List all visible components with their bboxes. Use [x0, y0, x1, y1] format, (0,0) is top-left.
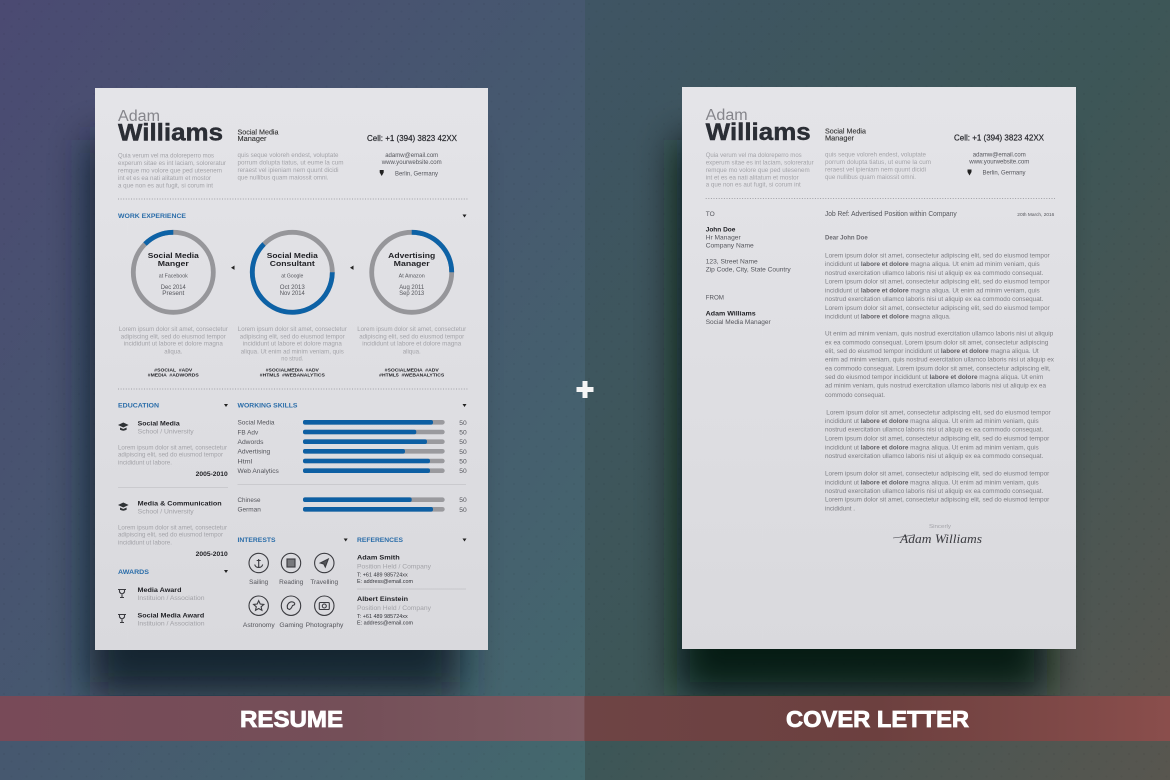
intro text left: a que non es aut fugit, si corum int: [706, 182, 801, 189]
sender block: FROM: [706, 294, 724, 301]
section: awards: Instituion / Association: [138, 595, 205, 602]
intro text right: reraest vel ipieniam nem quunt dicidi: [238, 167, 339, 174]
panel: resume page: [95, 88, 488, 650]
bottom label band: [0, 696, 1170, 741]
letter paragraph 2: elit, sed do eiusmod tempor incididunt ut labore et dolore magna aliqua. Ut: [825, 348, 1039, 355]
hashtags: #HTML5 #WEBANALYTICS: [379, 373, 444, 378]
job ring: Social Media Manger: Dec 2014: [161, 284, 186, 291]
icon: book: [281, 553, 301, 573]
contact details: Berlin, Germany: [395, 170, 439, 177]
skill labels: Web Analytics: [238, 468, 280, 475]
section: interests: [238, 537, 348, 629]
contact details: Berlin, Germany: [982, 170, 1026, 177]
letter paragraph 4: [825, 471, 1050, 512]
icon: anchor: [249, 553, 268, 573]
letter paragraph 2: [825, 331, 1055, 399]
job description 2: incididunt ut labore et dolore magna: [243, 341, 342, 348]
skill values: [459, 420, 467, 514]
skill values: 50: [459, 449, 467, 456]
letter paragraph 1: Lorem ipsum dolor sit amet, consectetur adipiscing elit, sed do eiusmod tempor: [825, 252, 1050, 259]
skill labels: German: [238, 507, 261, 514]
job description 3: [357, 326, 467, 355]
skill values: 50: [459, 439, 467, 446]
letter paragraph 1: Lorem ipsum dolor sit amet, consectetur adipiscing elit, sed do eiusmod tempor: [825, 305, 1050, 312]
job ring: Social Media Consultant: at Google: [281, 274, 303, 280]
skill labels: Advertising: [238, 449, 271, 456]
job description 2: Lorem ipsum dolor sit amet, consectetur: [238, 326, 348, 333]
contact details: [381, 152, 442, 177]
icon: graduation cap: [118, 502, 129, 511]
hashtags: [148, 368, 444, 378]
job ring: Social Media Manger: Social Media: [148, 251, 200, 260]
letter paragraph 3: Lorem ipsum dolor sit amet, consectetur adipiscing elit, sed do eiusmod tempor: [826, 409, 1051, 416]
recipient block: Hr Manager: [706, 234, 741, 241]
interest labels: Gaming: [279, 622, 304, 629]
section: awards: Instituion / Association: [138, 621, 205, 628]
job title: Social Media: [825, 129, 866, 136]
letter paragraph 1: incididunt ut labore et dolore magna aliqua.: [825, 314, 951, 321]
skill values: 50: [459, 468, 467, 475]
letter paragraph 1: incididunt ut labore et dolore magna aliqua. Ut enim ad minim veniam, quis: [825, 261, 1040, 268]
intro text right: quis seque voloreh endest, voluptate: [238, 152, 339, 159]
intro text right: reraest vel ipieniam nem quunt dicidi: [825, 166, 926, 174]
section: education: Lorem ipsum dolor sit amet, consectetur: [118, 444, 227, 451]
letter paragraph 1: nostrud exercitation ullamco laboris nisi ut aliquip ex ea commodo consequat.: [825, 296, 1043, 303]
job description 3: Lorem ipsum dolor sit amet, consectetur: [357, 326, 467, 333]
letter paragraph 2: enim ad minim veniam, quis nostrud exercitation ullamco laboris nisi ut aliquip ex: [825, 357, 1055, 364]
salutation: Dear John Doe: [825, 235, 868, 242]
paper sheet: [95, 88, 488, 650]
letter paragraph 1: incididunt ut labore et dolore magna aliqua. Ut enim ad minim veniam, quis: [825, 287, 1040, 294]
intro text left: experum sitae es int laciam, soloreratur: [706, 160, 814, 166]
phone: Cell: +1 (394) 3823 42XX: [367, 133, 457, 143]
skill labels: [238, 420, 280, 514]
skill values: 50: [459, 420, 467, 427]
section: references: Position Held / Company: [357, 605, 432, 612]
job ring: Advertising Manager: At Amazon: [399, 274, 425, 280]
interest labels: Photography: [306, 622, 344, 629]
section: references: [357, 537, 466, 627]
intro text left: remque mo volore que ped utesenem: [118, 168, 222, 174]
first name: Adam: [118, 108, 160, 125]
label: resume: RESUME: [240, 706, 343, 732]
sign-off: Sincerly: [929, 524, 951, 530]
section: interests: INTERESTS: [238, 537, 276, 544]
letter paragraph 3: nostrud exercitation ullamco laboris nisi ut aliquip ex ea commodo consequat.: [825, 427, 1043, 434]
hashtags: #SOCIAL #ADV: [154, 368, 192, 372]
intro text left: [118, 152, 227, 190]
icon: rocket: [315, 553, 334, 573]
recipient block: John Doe: [706, 226, 736, 233]
job title: Manager: [238, 136, 267, 143]
intro text right: quis seque voloreh endest, voluptate: [825, 152, 926, 158]
section: education: [118, 402, 228, 558]
intro text right: porrum dolupta tiatus, ut eume la cum: [238, 159, 344, 166]
job description 2: adipiscing elit, sed do eiusmod tempor: [240, 334, 346, 340]
job ring: Social Media Consultant: Social Media: [267, 251, 319, 260]
job ring: Social Media Consultant: [252, 232, 332, 312]
job ring: Advertising Manager: [372, 232, 452, 312]
job ring: Advertising Manager: Sep 2013: [399, 290, 425, 297]
contact details: adamw@email.com: [385, 152, 438, 159]
letter paragraph 3: nostrud exercitation ullamco laboris nisi ut aliquip ex ea commodo consequat.: [825, 453, 1043, 460]
panel: cover letter page: [682, 87, 1076, 649]
job ring: Advertising Manager: Aug 2011: [399, 284, 425, 291]
section: education: Social Media: [138, 420, 180, 428]
letter paragraph 2: commodo consequat.: [825, 392, 885, 399]
letter paragraph 3: [825, 409, 1051, 460]
job ring: Social Media Consultant: Consultant: [270, 259, 315, 268]
icon: trophy: [118, 614, 126, 622]
job description 2: aliqua. Ut enim ad minim veniam, quis: [241, 348, 344, 355]
letter paragraph 2: Ut enim ad minim veniam, quis nostrud exercitation ullamco laboris nisi ut aliquip: [825, 331, 1054, 338]
section: education: Media & Communication: [138, 500, 222, 507]
section: references: E: address@email.com: [357, 579, 414, 585]
section: education: adipiscing elit, sed do eiusmod tempor: [118, 452, 223, 459]
icon: location pin: [380, 170, 384, 176]
job ring: Advertising Manager: Advertising: [388, 251, 436, 260]
label: cover letter: COVER LETTER: [786, 706, 969, 732]
letter paragraph 4: Lorem ipsum dolor sit amet, consectetur adipiscing elit, sed do eiusmod tempor: [825, 471, 1050, 478]
last name: Williams: [118, 120, 223, 147]
skill labels: Chinese: [238, 497, 261, 504]
date: 20th March, 2016: [1017, 212, 1055, 218]
paper shadow: resume: [90, 140, 460, 695]
skill values: 50: [459, 458, 467, 466]
section: education: EDUCATION: [118, 402, 159, 409]
job reference: Job Ref: Advertised Position within Company: [825, 209, 957, 218]
recipient block: [706, 211, 791, 274]
arrow: [231, 266, 234, 270]
letter paragraph 2: sed do eiusmod tempor incididunt ut labore et dolore magna aliqua. Ut enim: [825, 374, 1044, 381]
intro text left: a que non es aut fugit, si corum int: [118, 182, 213, 190]
icon: gamepad: [281, 596, 301, 615]
letter paragraph 3: Lorem ipsum dolor sit amet, consectetur adipiscing elit, sed do eiusmod tempor: [825, 436, 1050, 443]
contact details: [968, 151, 1029, 177]
icon: trophy: [118, 590, 126, 598]
letter paragraph 1: [825, 252, 1050, 321]
job description 3: incididunt ut labore et dolore magna: [362, 341, 462, 348]
icon: star: [249, 596, 268, 615]
section: references: T: +61 489 985724xx: [357, 614, 408, 620]
section: references: REFERENCES: [357, 537, 403, 544]
interest labels: Travelling: [310, 579, 339, 586]
skill values: 50: [459, 430, 467, 436]
interest labels: Astronomy: [243, 622, 276, 629]
intro text left: int et es ea nati alitatum et mostor: [706, 174, 799, 181]
skill labels: FB Adv: [238, 429, 259, 436]
intro text left: int et es ea nati alitatum et mostor: [118, 175, 212, 182]
interest labels: Sailing: [249, 579, 269, 586]
background: cover letter side: [585, 0, 1170, 780]
skill labels: Social Media: [238, 420, 275, 427]
skill bars: track: [303, 420, 445, 512]
letter paragraph 3: incididunt ut labore et dolore magna aliqua. Ut enim ad minim veniam, quis: [825, 444, 1039, 451]
section: education: incididunt ut labore.: [118, 459, 172, 466]
intro text left: experum sitae es int laciam, soloreratur: [118, 160, 227, 167]
job title: [825, 129, 866, 142]
contact details: www.yourwebsite.com: [381, 159, 442, 166]
section: awards: Media Award: [138, 587, 182, 594]
intro text right: porrum dolupta tiatus, ut eume la cum: [825, 159, 931, 166]
section: awards: [118, 569, 228, 628]
job description 1: adipiscing elit, sed do eiusmod tempor: [121, 334, 227, 340]
section: education: School / University: [138, 508, 194, 515]
section: references: Position Held / Company: [357, 563, 432, 570]
hashtags: #SOCIALMEDIA #ADV: [266, 368, 319, 372]
contact details: adamw@email.com: [973, 151, 1026, 158]
paper shadow: cover letter: [677, 140, 1047, 695]
job description 3: aliqua.: [403, 348, 421, 355]
letter paragraph 1: nostrud exercitation ullamco laboris nisi ut aliquip ex ea commodo consequat.: [825, 270, 1043, 277]
last name: Williams: [706, 119, 811, 146]
plus sign: [576, 381, 594, 398]
hashtags: #SOCIALMEDIA #ADV: [385, 368, 439, 372]
hashtags: #HTML5 #WEBANALYTICS: [260, 373, 325, 378]
intro text left: [706, 152, 814, 189]
letter paragraph 1: Lorem ipsum dolor sit amet, consectetur adipiscing elit, sed do eiusmod tempor: [825, 279, 1050, 286]
phone: Cell: +1 (394) 3823 42XX: [954, 132, 1044, 142]
job description 1: [119, 326, 229, 355]
job title: Manager: [825, 135, 855, 142]
intro text left: Quia verum vel ma doloreperro mos: [118, 152, 215, 160]
recipient block: Zip Code, City, State Country: [706, 267, 791, 274]
section: awards: AWARDS: [118, 569, 149, 576]
job description 2: no strud.: [281, 355, 303, 362]
heading: work experience: WORK EXPERIENCE: [118, 213, 186, 220]
letter paragraph 2: ex ea commodo consequat. Lorem ipsum dolor sit amet, consectetur adipiscing: [825, 339, 1049, 346]
letter paragraph 3: incididunt ut labore et dolore magna aliqua. Ut enim ad minim veniam, quis: [825, 418, 1039, 425]
job ring: Social Media Consultant: Oct 2013: [280, 284, 305, 291]
letter paragraph 4: incididunt .: [825, 505, 855, 512]
arrow: [350, 266, 354, 270]
intro text right: que nullibus quam maiossit omni.: [825, 174, 916, 181]
first name: Adam: [706, 107, 748, 124]
intro text right: que nullibus quam maiossit omni.: [238, 174, 329, 181]
section: working skills: WORKING SKILLS: [238, 402, 298, 409]
sender block: [706, 294, 771, 326]
job ring: Advertising Manager: Manager: [394, 259, 430, 268]
job description 3: adipiscing elit, sed do eiusmod tempor: [359, 334, 465, 340]
paper sheet: [682, 87, 1076, 649]
recipient block: Company Name: [706, 242, 754, 249]
sender block: Social Media Manager: [706, 319, 771, 326]
hashtags: #MEDIA #ADWORDS: [148, 373, 199, 378]
signature: Adam Williams: [899, 531, 982, 546]
contact details: www.yourwebsite.com: [968, 158, 1029, 165]
section: education: adipiscing elit, sed do eiusmod tempor: [118, 532, 223, 539]
section: education: Lorem ipsum dolor sit amet, consectetur: [118, 524, 227, 531]
job title: [238, 130, 279, 143]
icon: graduation cap: [118, 422, 129, 431]
letter paragraph 4: incididunt ut labore et dolore magna aliqua. Ut enim ad minim veniam, quis: [825, 479, 1039, 486]
job description 2: [238, 326, 348, 362]
skill bars: fill: [303, 420, 433, 512]
recipient block: 123, Street Name: [706, 259, 758, 266]
job description 1: aliqua.: [164, 348, 182, 355]
job ring: Social Media Consultant: Nov 2014: [280, 290, 305, 297]
section: education: incididunt ut labore.: [118, 539, 172, 546]
recipient block: TO: [706, 211, 715, 218]
job ring: Social Media Manger: [133, 232, 213, 312]
interest labels: [243, 579, 344, 629]
section: references: E: address@email.com: [357, 621, 414, 627]
skill values: 50: [459, 507, 467, 514]
intro text right: [825, 152, 931, 181]
job ring: Social Media Manger: Manger: [158, 259, 189, 268]
section: education: School / University: [138, 428, 194, 435]
job title: Social Media: [238, 130, 279, 136]
skill labels: Adwords: [238, 439, 264, 446]
letter paragraph 4: nostrud exercitation ullamco laboris nisi ut aliquip ex ea commodo consequat.: [825, 488, 1043, 495]
letter paragraph 2: ea commodo consequat. Lorem ipsum dolor sit amet, consectetur adipiscing elit,: [825, 365, 1051, 372]
section: education: 2005-2010: [196, 471, 228, 478]
section: education: 2005-2010: [196, 551, 228, 558]
icon: location pin: [968, 170, 972, 176]
job description 1: incididunt ut labore et dolore magna: [124, 341, 223, 348]
section: awards: Social Media Award: [138, 612, 204, 619]
skill labels: Html: [238, 458, 253, 465]
background: resume side: [0, 0, 585, 780]
section: references: T: +61 489 985724xx: [357, 572, 408, 578]
section: working skills: [238, 402, 467, 514]
interest labels: Reading: [279, 579, 304, 586]
intro text right: [238, 152, 344, 181]
section: references: Albert Einstein: [357, 596, 408, 603]
sender block: Adam Williams: [706, 311, 756, 318]
icon: camera: [315, 596, 334, 615]
letter paragraph 2: ad minim veniam, quis nostrud exercitation ullamco laboris nisi ut aliquip ex ea: [825, 383, 1046, 390]
job ring: Social Media Manger: Present: [162, 290, 185, 297]
job ring: Social Media Manger: at Facebook: [159, 274, 188, 280]
intro text left: remque mo volore que ped utesenem: [706, 167, 810, 174]
skill values: 50: [459, 497, 467, 504]
section marker: [462, 214, 466, 218]
letter paragraph 4: Lorem ipsum dolor sit amet, consectetur adipiscing elit, sed do eiusmod tempor: [825, 497, 1050, 504]
job description 1: Lorem ipsum dolor sit amet, consectetur: [119, 326, 229, 333]
section: references: Adam Smith: [357, 554, 400, 561]
intro text left: Quia verum vel ma doloreperro mos: [706, 152, 802, 159]
